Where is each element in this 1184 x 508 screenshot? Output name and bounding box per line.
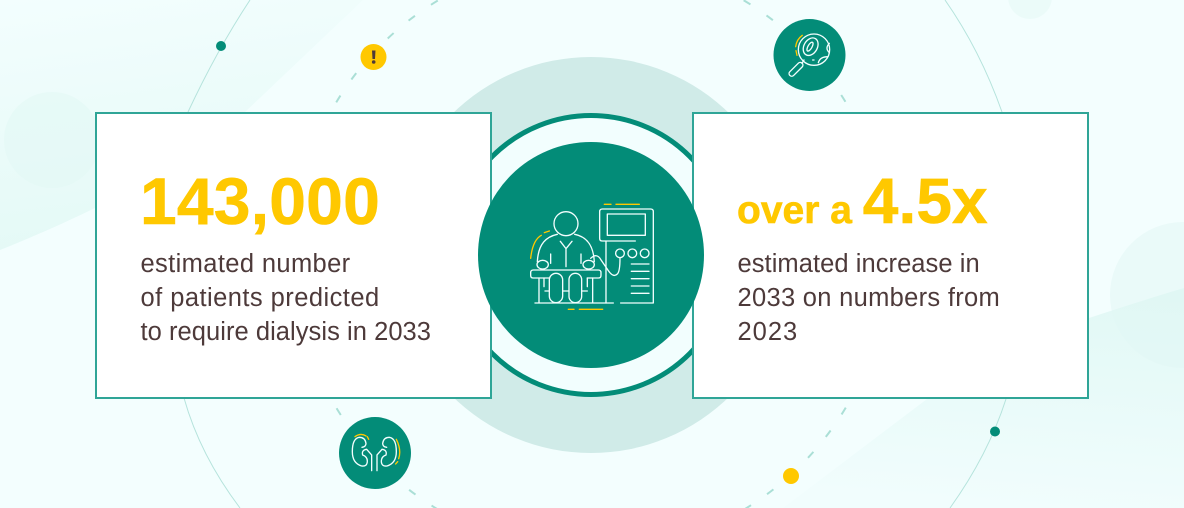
text: left description: of patients predicted: [140, 284, 380, 312]
text: right description: 2023: [738, 318, 798, 346]
text: left description: [140, 250, 431, 346]
heading: 143,000: 143,000: [140, 164, 380, 238]
text: left description: to require dialysis in 2033: [140, 318, 431, 346]
icon: patient on dialysis machine: [531, 204, 653, 309]
text: right description: 2033 on numbers from: [738, 284, 1000, 312]
panel: left statistic: [95, 112, 492, 399]
heading: over a 4.5x: over a 4.5x: [737, 165, 988, 237]
text: right description: estimated increase in: [738, 250, 980, 278]
panel: right statistic: [692, 112, 1089, 399]
text: right description: [738, 250, 1000, 346]
text: left description: estimated number: [140, 250, 351, 278]
